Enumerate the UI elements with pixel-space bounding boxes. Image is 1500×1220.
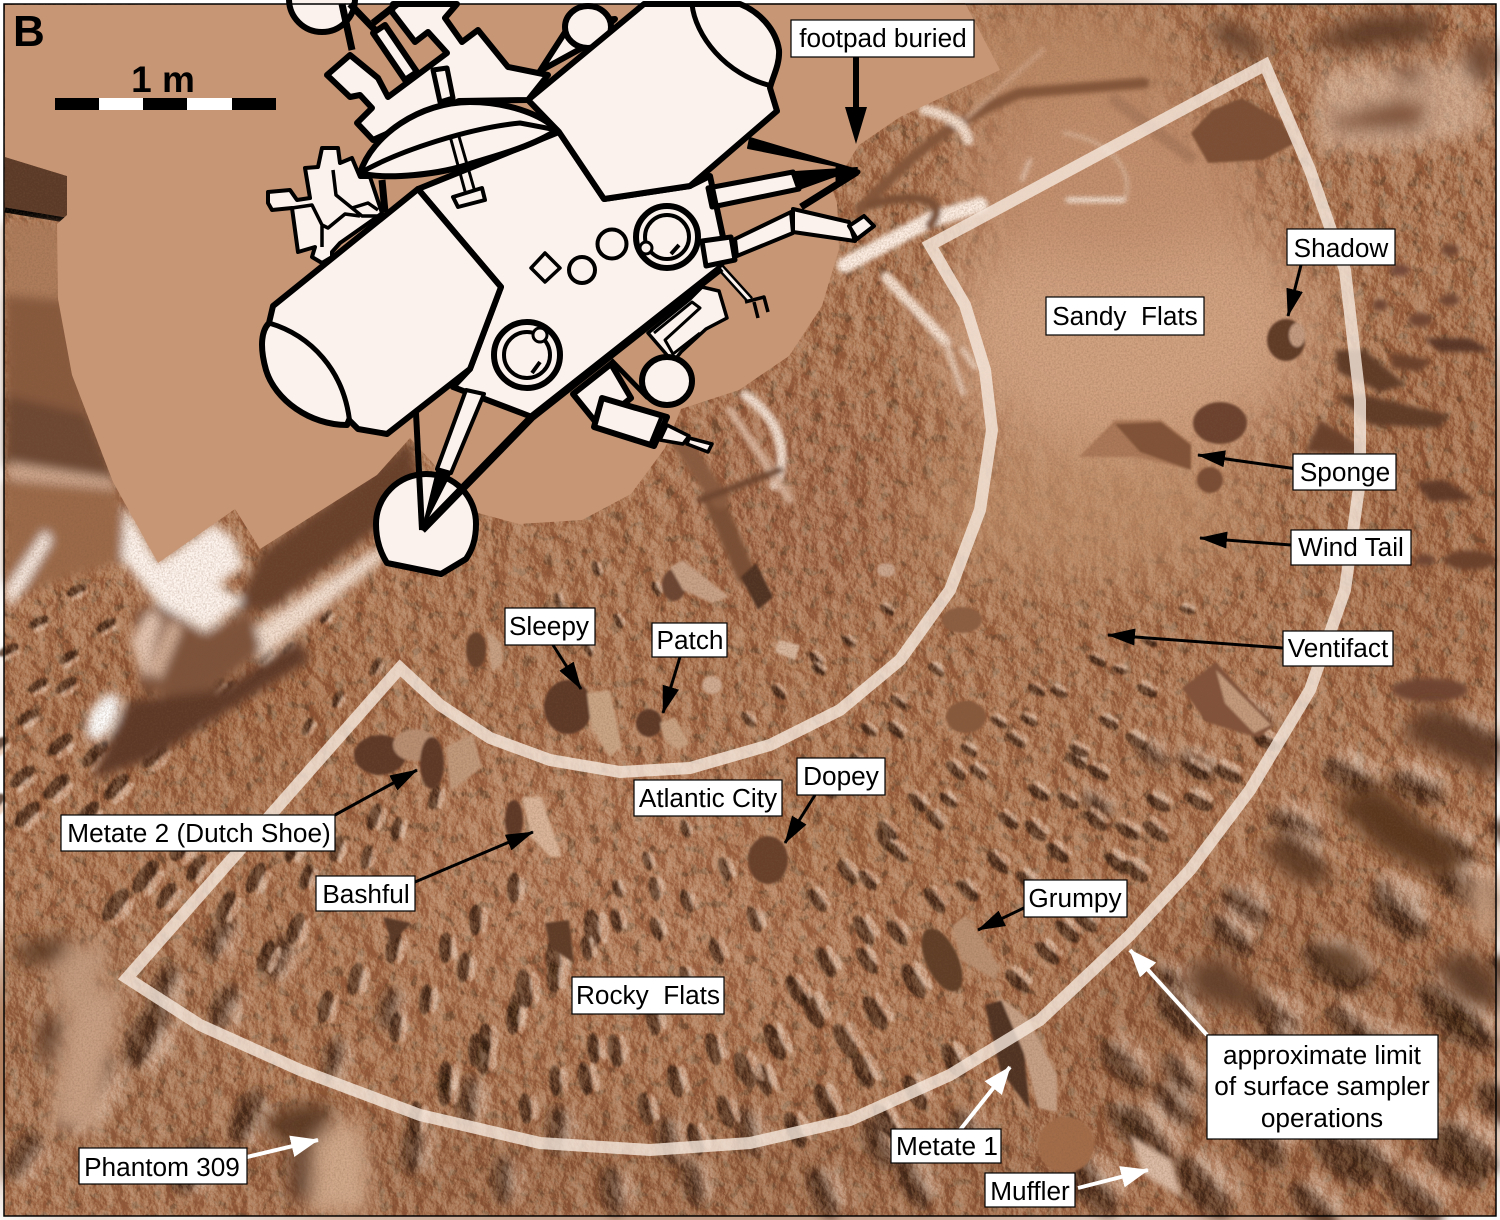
label: Muffler: Muffler: [990, 1176, 1070, 1206]
upper mast assembly: [327, 4, 548, 140]
label: Wind Tail: Wind Tail: [1298, 532, 1404, 562]
arrow: Wind Tail: [1200, 538, 1291, 545]
label: Patch: Patch: [657, 625, 723, 655]
label: approximate limit of surface sampler operations: operations: [1261, 1103, 1383, 1133]
surface sampler limit band: [127, 65, 1360, 1150]
rocky upper right: [1208, 15, 1496, 150]
label: Dopey: Dopey: [803, 761, 880, 791]
arrow: Phantom 309: [247, 1140, 318, 1157]
label: approximate limit of surface sampler operations: [1207, 1035, 1438, 1139]
rocks near Sleepy and Patch: [544, 680, 689, 757]
arrow: Patch: [663, 657, 680, 713]
arrow: Ventifact: [1108, 635, 1283, 648]
Dopey rock: [748, 836, 788, 884]
dark rocks along the right edge: [1305, 244, 1496, 702]
label: approximate limit of surface sampler operations: of surface sampler: [1214, 1071, 1430, 1101]
big pale rock: [662, 560, 729, 603]
scale bar: [55, 59, 276, 110]
high-gain antenna dish: [360, 68, 557, 207]
Metate 2 rock group: [354, 729, 482, 792]
panel letter: B: [13, 7, 45, 56]
top antenna ball: [289, 0, 355, 32]
label: Ventifact: Ventifact: [1288, 633, 1389, 663]
arrow: Muffler: [1078, 1170, 1148, 1188]
arrow: Metate 2: [335, 770, 417, 815]
arrow: Shadow: [1288, 265, 1301, 316]
flat brown patch: [1038, 1117, 1094, 1173]
arrow: Sleepy: [553, 645, 581, 689]
arrow: footpad buried: [853, 57, 859, 112]
motion-blurred foreground shapes: [14, 703, 1499, 1213]
panel: tan lander mask: [5, 3, 1000, 563]
footpad: [376, 474, 476, 574]
label: footpad buried: footpad buried: [799, 23, 967, 53]
streaked foreground rocks: [0, 689, 1500, 1220]
label: Phantom 309: Phantom 309: [84, 1152, 240, 1182]
label: Bashful: Bashful: [322, 879, 410, 909]
articulated panel: [268, 148, 385, 263]
lower legs: [416, 268, 721, 530]
fork tool: [721, 268, 768, 318]
Bashful rock: [505, 797, 562, 857]
Sponge rock: [1079, 420, 1191, 470]
label: Grumpy: Grumpy: [1028, 883, 1122, 913]
label: Sponge: Sponge: [1300, 457, 1390, 487]
label: Sleepy: Sleepy: [509, 611, 590, 641]
label: Shadow: Shadow: [1294, 233, 1388, 263]
label: Metate 2 (Dutch Shoe): Metate 2 (Dutch Shoe): [67, 818, 331, 848]
arrow head: footpad buried: [845, 107, 867, 144]
instrument rings and ports: [494, 206, 698, 388]
arrow: Sponge: [1198, 455, 1297, 469]
arrow: Grumpy: [978, 905, 1030, 930]
scale bar: 1 m: [131, 59, 195, 100]
smooth sandy flats: [920, 10, 1320, 580]
lower left cylinder: [262, 189, 501, 434]
label: Rocky Flats: Rocky Flats: [576, 980, 720, 1010]
main body: [418, 132, 723, 417]
lower equipment box: [642, 287, 727, 405]
arrow: Bashful: [415, 832, 533, 882]
label: Metate 1: Metate 1: [896, 1131, 998, 1161]
diagram: lander line drawing: [262, 0, 874, 574]
label: Atlantic City: Atlantic City: [639, 783, 778, 813]
Muffler rock: [1129, 1134, 1182, 1198]
strut shadow on the ground: [741, 563, 773, 610]
mid-field rocks: [0, 559, 1285, 1158]
right footpad struts: [708, 138, 858, 237]
Metate 1 rock: [985, 997, 1057, 1112]
label: Sandy Flats: Sandy Flats: [1052, 301, 1198, 331]
upper right cylinder: [528, 4, 779, 199]
side camera: [573, 360, 712, 452]
soft tonal regions of the surface: [0, 310, 1500, 1220]
large right rock: [1182, 662, 1273, 738]
Shadow rock: [1267, 319, 1305, 361]
label: Dopey: [797, 758, 885, 795]
rear cone and sphere: [540, 6, 615, 71]
named rocks and their shadows: [354, 98, 1496, 1198]
dark rock in sector tip: [1191, 98, 1295, 163]
arrow: Metate 1: [960, 1067, 1010, 1130]
dark hardware panel at left edge: [5, 157, 67, 222]
label: approximate limit of surface sampler operations: approximate limit: [1223, 1040, 1422, 1070]
arrow: approximate limit: [1130, 950, 1207, 1035]
Grumpy rock: [913, 915, 1000, 998]
arrow: Dopey: [785, 795, 815, 843]
sampler arm: [702, 209, 874, 266]
blurred lander struts and shadows: [680, 50, 1190, 575]
blurred lander hardware on the left: [5, 222, 420, 780]
